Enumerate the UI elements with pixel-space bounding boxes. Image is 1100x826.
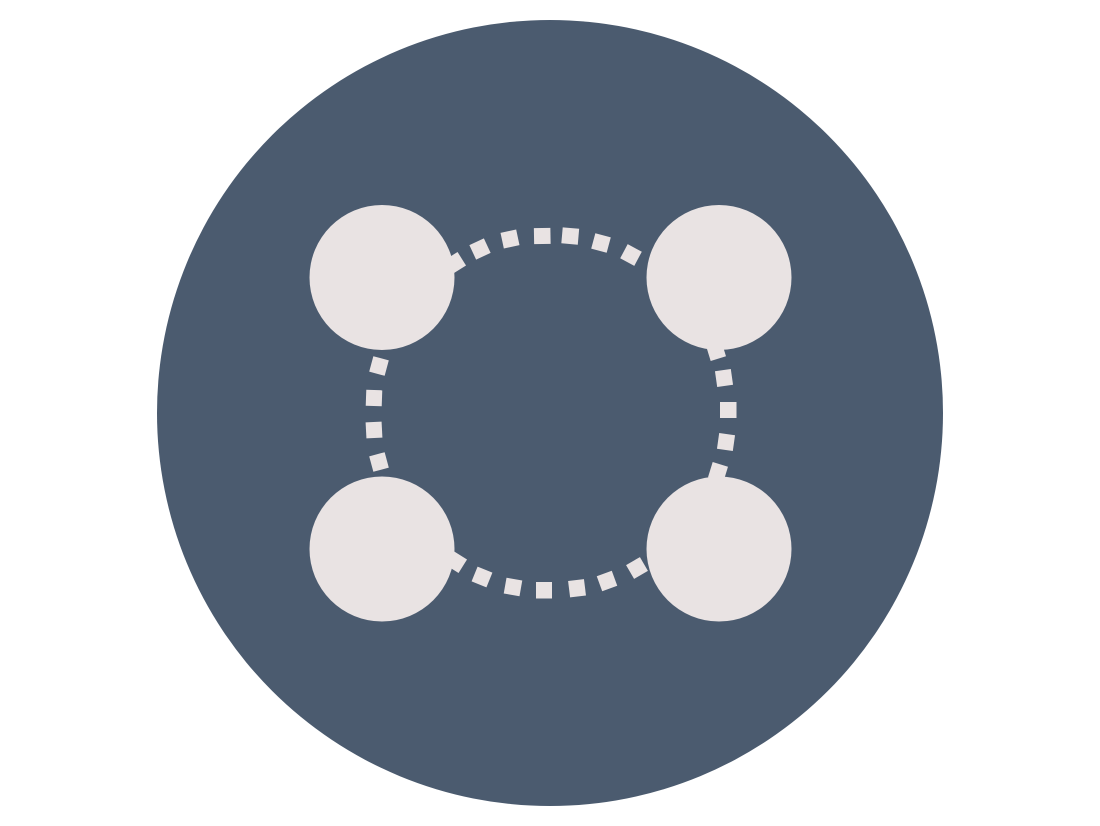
background disc (157, 20, 943, 806)
dashed ring connecting nodes (366, 227, 736, 598)
node: bottom right (646, 476, 792, 622)
node: top left (310, 205, 454, 350)
node: bottom left (310, 476, 454, 622)
node: top right (646, 205, 792, 350)
